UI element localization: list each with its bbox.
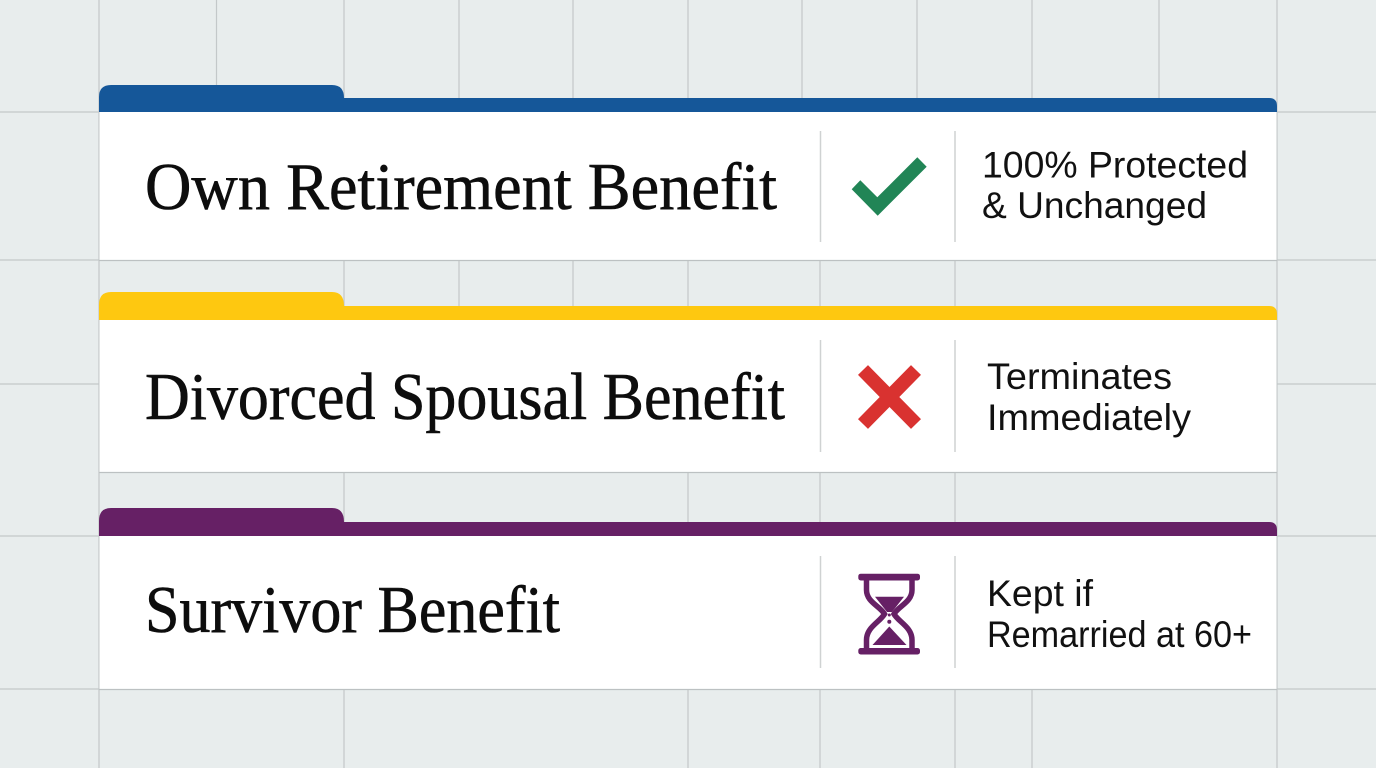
- column dividers: [820, 340, 955, 452]
- heading: divorced spousal benefit: Divorced Spousal Benefit: [145, 360, 785, 434]
- yellow folder tab header: [99, 292, 1277, 320]
- icon: red cross: [863, 370, 916, 424]
- status text: kept if remarried: Remarried at 60+: [987, 614, 1252, 655]
- white row: [100, 320, 1276, 472]
- status text: protected: 100% Protected: [982, 144, 1248, 186]
- status text: terminates: Terminates: [987, 356, 1172, 397]
- panel: survivor benefit: [99, 508, 1277, 689]
- blue folder tab header: [99, 85, 1277, 112]
- panel: divorced spousal benefit: [99, 292, 1277, 472]
- icon: hourglass: [858, 574, 920, 654]
- status text: terminates: [987, 356, 1192, 438]
- purple folder tab header: [99, 508, 1277, 536]
- heading: survivor benefit: Survivor Benefit: [145, 573, 560, 647]
- icon: green check mark: [852, 157, 927, 216]
- status text: terminates: Immediately: [987, 397, 1192, 438]
- heading: own retirement benefit: Own Retirement Benefit: [145, 150, 777, 224]
- column dividers: [820, 556, 955, 668]
- white row: [100, 536, 1276, 689]
- status text: kept if remarried: [987, 573, 1252, 655]
- panel: own retirement benefit: [99, 85, 1277, 260]
- column dividers: [820, 131, 955, 242]
- status text: protected: & Unchanged: [982, 185, 1207, 226]
- white row: [100, 112, 1276, 260]
- status text: protected: [982, 144, 1248, 226]
- status text: kept if remarried: Kept if: [987, 573, 1094, 614]
